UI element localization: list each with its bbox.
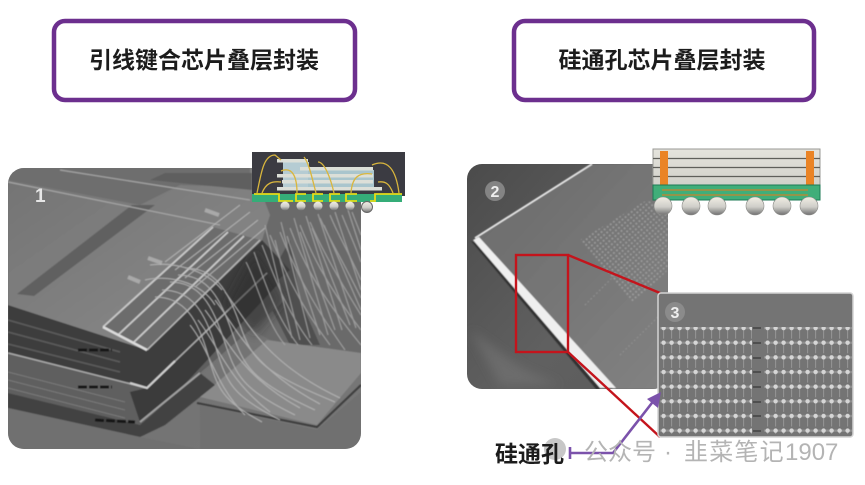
lit floor plate	[200, 340, 361, 425]
watermark text: 韭菜笔记	[684, 439, 785, 466]
inset: TSV package cross-section	[653, 149, 820, 215]
solder balls	[280, 202, 372, 212]
stepped bright edges of upper die	[103, 227, 260, 350]
TSV label: 硅通孔	[495, 441, 564, 467]
photo 2: TSV die corner micrograph	[467, 164, 680, 389]
purple arrow	[570, 392, 661, 459]
title box: TSV stack	[514, 21, 814, 100]
photo 1: wire bonded die stack micrograph	[8, 168, 361, 449]
photo 3: TSV array close-up	[658, 293, 853, 437]
inset: wire bond package cross-section	[252, 152, 405, 212]
watermark icon	[544, 438, 566, 460]
title box: TSV stack: 硅通孔芯片叠层封装	[558, 47, 766, 73]
photo 2 number: 2	[491, 184, 500, 201]
watermark text: 公众号	[584, 439, 656, 466]
watermark text: 1907	[785, 439, 838, 466]
die stack	[283, 162, 309, 190]
bond wire loops	[257, 155, 399, 193]
photo 3: TSV array close-up: 3	[671, 305, 680, 322]
yellow traces	[254, 194, 402, 201]
layer sides	[8, 240, 290, 388]
title box: wire bonding stack	[54, 21, 355, 100]
backdrop behind wires	[258, 202, 360, 352]
bond wires	[246, 210, 361, 350]
red zoom box	[516, 255, 660, 437]
green substrate	[252, 194, 402, 202]
photo 2 number	[485, 181, 505, 201]
TSV array on the die	[580, 200, 668, 303]
title box: wire bonding stack: 引线键合芯片叠层封装	[89, 47, 319, 73]
photo 1 number: 1	[35, 186, 46, 207]
watermark text: ·	[664, 439, 672, 466]
top die	[8, 168, 270, 350]
